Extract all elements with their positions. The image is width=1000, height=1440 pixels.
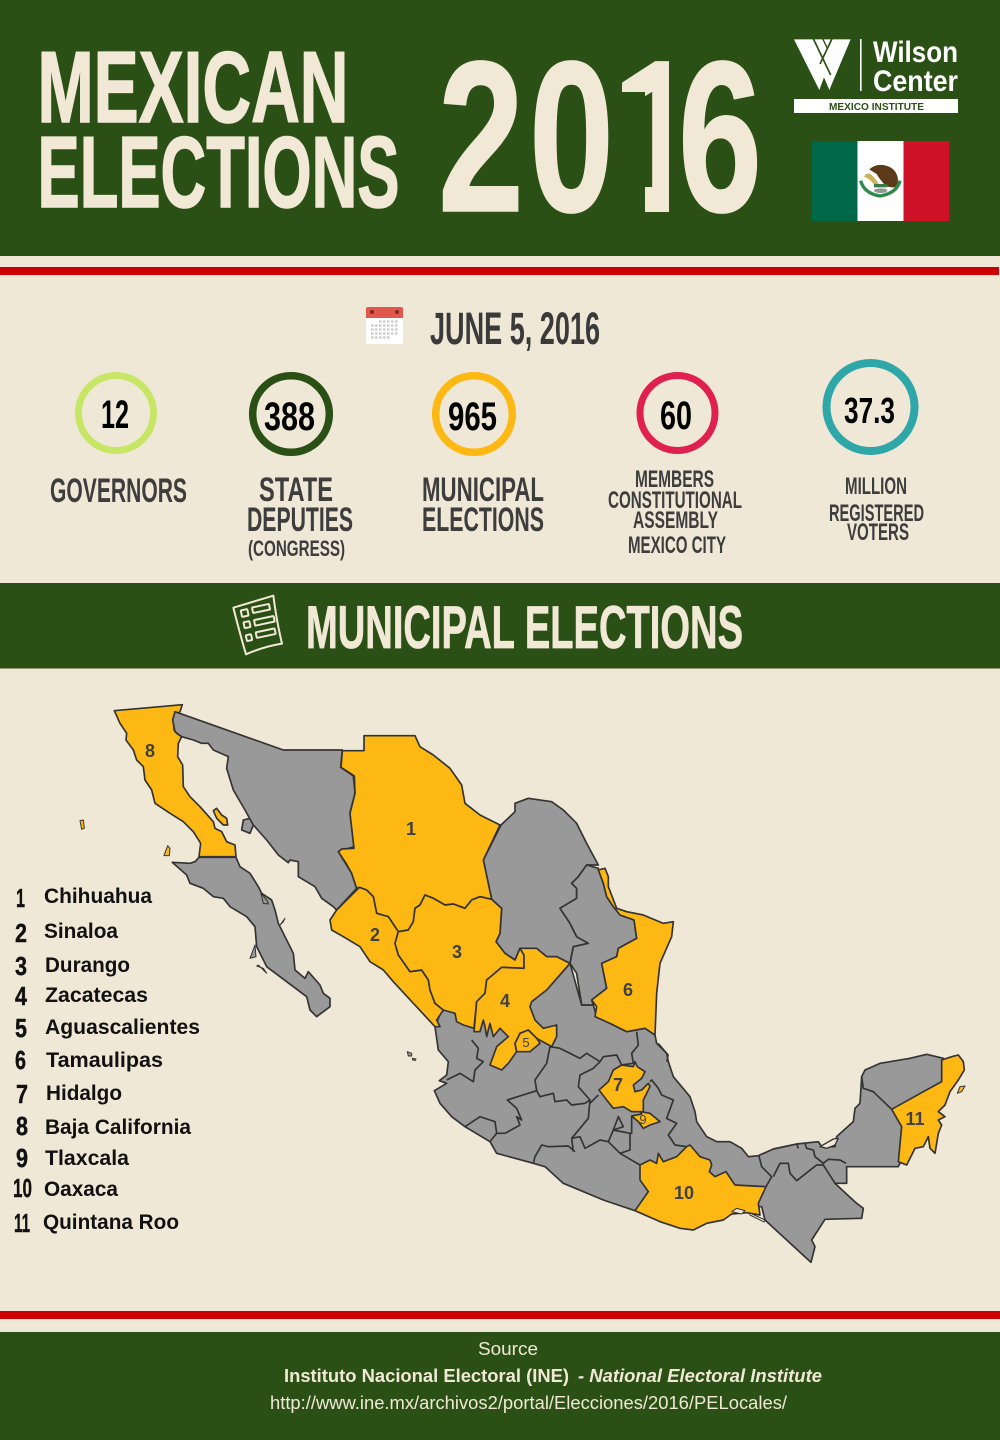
panel: source footer: Source (478, 1339, 538, 1359)
legend: states: Sinaloa (44, 920, 118, 943)
stat: state deputies: 388 (264, 395, 315, 439)
date row (366, 303, 600, 354)
title: 2 (438, 16, 524, 257)
legend: states: 6 (15, 1045, 26, 1075)
stat: state deputies: (CONGRESS) (248, 536, 345, 561)
stat: municipal elections (422, 376, 544, 539)
title: 6 (678, 16, 762, 257)
state number labels: 8 (145, 741, 155, 761)
legend: states (13, 883, 200, 1238)
legend: states: Oaxaca (44, 1178, 118, 1201)
logo: Wilson Center: Center (873, 65, 958, 98)
legend: states: 10 (13, 1173, 32, 1203)
state number labels: 7 (613, 1075, 623, 1095)
legend: states: 2 (15, 918, 27, 948)
legend: states: Chihuahua (44, 885, 152, 908)
icon: calendar (366, 307, 403, 344)
panel: source footer: http://www.ine.mx/archivos2/portal/Elecciones/2016/PELocales/ (270, 1393, 787, 1413)
stat: governors (50, 376, 187, 510)
stat: registered voters: REGISTERED (829, 500, 924, 527)
state number labels: 5 (522, 1035, 530, 1050)
stat: constitutional assembly: MEMBERS (635, 466, 714, 493)
stat: governors: GOVERNORS (50, 472, 187, 510)
state number labels: 4 (500, 991, 510, 1011)
legend: states: 3 (15, 951, 27, 981)
icon: Mexican flag (812, 141, 949, 221)
legend: states: 7 (16, 1079, 28, 1109)
stat: registered voters: VOTERS (847, 519, 909, 546)
north and central gold states (330, 736, 673, 1070)
title: 0 (529, 16, 614, 257)
state number labels: 6 (623, 980, 633, 1000)
logo: Wilson Center (794, 36, 958, 113)
legend: states: Tamaulipas (46, 1049, 163, 1072)
stat: governors: 12 (101, 393, 129, 437)
title: 1 (604, 16, 724, 257)
map of Mexico (80, 705, 965, 1262)
logo: Wilson Center: Wilson (873, 36, 958, 69)
legend: states: 8 (16, 1111, 28, 1141)
panel: source footer: - National Electoral Institute (578, 1366, 822, 1386)
northwest states (80, 705, 357, 1017)
eastern states (759, 1055, 965, 1187)
legend: states: Zacatecas (45, 984, 148, 1007)
stat: constitutional assembly (608, 376, 742, 559)
logo: Wilson Center: MEXICO INSTITUTE (829, 102, 924, 113)
stat: municipal elections: MUNICIPAL (422, 471, 544, 509)
legend: states: 11 (14, 1208, 30, 1238)
icon: checklist (233, 596, 282, 654)
state number labels: 10 (674, 1183, 694, 1203)
stat: constitutional assembly: ASSEMBLY (633, 507, 718, 534)
stat: state deputies: DEPUTIES (247, 501, 353, 539)
stat: constitutional assembly: CONSTITUTIONAL (608, 487, 742, 514)
state number labels: 2 (370, 925, 380, 945)
legend: states: Baja California (45, 1116, 191, 1139)
panel: header (0, 0, 1000, 257)
legend: states: Hidalgo (46, 1082, 122, 1105)
stat: registered voters: MILLION (845, 473, 907, 500)
stat: constitutional assembly: MEXICO CITY (628, 532, 726, 559)
legend: states: 1 (16, 883, 25, 913)
panel: source footer (0, 1332, 1000, 1440)
divider: top red bar (0, 267, 999, 275)
stat: registered voters: 37.3 (844, 390, 895, 431)
title: ELECTIONS (38, 117, 400, 229)
title: MEXICAN (38, 32, 348, 144)
state number labels: 11 (905, 1109, 925, 1129)
panel: municipal elections banner (0, 583, 1000, 668)
state number labels: 1 (406, 819, 416, 839)
stat: municipal elections: 965 (448, 395, 497, 439)
legend: states: Quintana Roo (43, 1211, 179, 1234)
legend: states: 9 (16, 1143, 28, 1173)
stat: municipal elections: ELECTIONS (422, 501, 544, 539)
legend: states: Durango (45, 954, 130, 977)
stat: state deputies (247, 376, 353, 561)
legend: states: 4 (15, 981, 27, 1011)
stat: constitutional assembly: 60 (660, 394, 692, 438)
legend: states: 5 (15, 1013, 27, 1043)
heading: MUNICIPAL ELECTIONS (306, 594, 743, 661)
legend: states: Tlaxcala (45, 1147, 129, 1170)
stat: registered voters (826, 363, 924, 546)
stat: state deputies: STATE (259, 471, 333, 509)
state number labels: 9 (639, 1112, 647, 1127)
state number labels: 3 (452, 942, 462, 962)
date text: JUNE 5, 2016 (430, 303, 600, 354)
state number labels (145, 741, 925, 1203)
divider: bottom red bar (0, 1311, 1000, 1319)
panel: source footer: Instituto Nacional Electoral (INE) (284, 1366, 569, 1386)
legend: states: Aguascalientes (45, 1016, 200, 1039)
central and southern states (407, 963, 947, 1262)
title (41, 50, 758, 214)
